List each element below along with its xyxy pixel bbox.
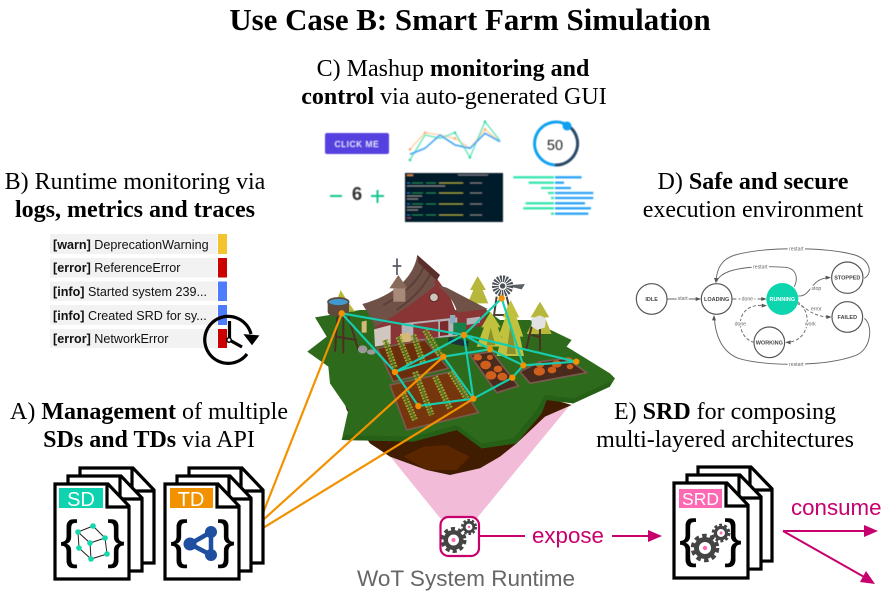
gauge: 50: 50 <box>547 138 563 154</box>
log row: info started: [info] Started system 239... <box>53 285 207 299</box>
heading: B runtime monitoring: B) Runtime monitoring via <box>5 169 266 195</box>
icon: SD document stack <box>55 468 154 579</box>
arrows: consume <box>783 495 881 584</box>
network nodes <box>338 295 579 409</box>
state machine diagram: start <box>678 296 688 302</box>
icon: clock history <box>205 316 258 363</box>
state machine diagram: done <box>742 297 753 303</box>
state machine diagram: stop <box>811 286 821 292</box>
gauge: 50 <box>535 122 578 165</box>
state machine diagram <box>636 246 870 368</box>
label: WoT System Runtime: WoT System Runtime <box>357 566 575 591</box>
title: Use Case B: Smart Farm Simulation <box>229 2 711 37</box>
button: click me <box>325 133 389 154</box>
braces: } <box>724 510 742 568</box>
terminal <box>405 173 503 222</box>
state machine diagram: FAILED <box>838 315 857 321</box>
bar chart <box>513 177 593 214</box>
state machine diagram: restart <box>753 265 768 271</box>
heading: D safe and secure <box>643 169 864 223</box>
state machine diagram: work <box>805 322 816 328</box>
island underside <box>307 352 572 475</box>
farm island <box>307 255 615 475</box>
IoT network edges <box>342 298 576 406</box>
panel: logs <box>50 234 258 363</box>
braces <box>679 510 742 568</box>
state machine diagram: STOPPED <box>834 276 860 282</box>
SD tag: SD <box>67 489 95 511</box>
button: click me: CLICK ME <box>335 139 379 149</box>
heading: A management <box>10 399 288 453</box>
orange connector lines <box>237 313 473 544</box>
braces <box>60 511 125 569</box>
line chart <box>409 120 500 161</box>
TD tag: TD <box>178 489 204 511</box>
icon: cube network <box>75 523 110 562</box>
heading: D safe and secure: D) Safe and secure <box>658 169 849 195</box>
state machine diagram: RUNNING <box>770 297 795 303</box>
island grass <box>307 310 615 448</box>
heading: C mashup monitoring <box>301 56 607 110</box>
log row: info created: [info] Created SRD for sy... <box>53 309 207 323</box>
braces: } <box>217 511 235 569</box>
heading: E SRD <box>596 399 854 453</box>
water tower right <box>526 315 546 351</box>
braces: { <box>60 511 78 569</box>
icon: TD document stack <box>165 468 263 579</box>
tractor <box>448 323 468 344</box>
braces <box>170 511 235 569</box>
SRD tag: SRD <box>682 489 719 509</box>
state machine diagram: LOADING <box>704 297 729 303</box>
gears <box>693 525 729 560</box>
pumpkins <box>473 354 573 381</box>
stepper: 6 <box>330 183 384 204</box>
braces: } <box>107 511 125 569</box>
heading: B runtime monitoring <box>5 169 266 223</box>
barn <box>362 255 488 347</box>
heading: D safe and secure: execution environment <box>643 197 864 223</box>
log row: error reference <box>50 258 227 278</box>
heading: C mashup monitoring: control via auto-generated GUI <box>301 84 607 110</box>
icon: SRD document stack <box>674 467 772 578</box>
braces: { <box>679 510 697 568</box>
wing roof <box>437 285 488 313</box>
state machine diagram: done <box>735 321 746 327</box>
heading: A management: A) Management of multiple <box>10 399 288 425</box>
state machine diagram: restart <box>789 362 804 368</box>
heading: E SRD: E) SRD for composing <box>614 399 836 425</box>
gable wall <box>375 278 458 347</box>
heading: A management: SDs and TDs via API <box>43 427 255 453</box>
cupola <box>389 275 407 288</box>
windmill <box>493 279 525 325</box>
heading: B runtime monitoring: logs, metrics and traces <box>15 197 255 223</box>
arrows: consume: consume <box>791 495 881 520</box>
corn rows <box>385 330 467 420</box>
arrow: expose <box>479 523 662 548</box>
trees front <box>477 300 524 356</box>
arrow: expose: expose <box>532 523 604 548</box>
panel: GUI widgets <box>325 120 593 222</box>
heading: E SRD: multi-layered architectures <box>596 427 854 453</box>
log row: warn: [warn] DeprecationWarning <box>53 238 209 252</box>
wing wall <box>447 308 487 335</box>
log row: error network <box>50 329 227 348</box>
state machine diagram: IDLE <box>645 297 658 303</box>
crop plots <box>377 340 448 382</box>
log row: error reference: [error] ReferenceError <box>53 261 180 275</box>
log row: warn <box>50 234 227 254</box>
water tower left <box>328 298 358 353</box>
stepper: 6: 6 <box>352 183 362 204</box>
state machine diagram: restart <box>789 246 804 252</box>
log row: info started <box>50 282 227 301</box>
pink projection cone <box>385 400 570 518</box>
braces: { <box>170 511 188 569</box>
log row: info created <box>50 305 227 325</box>
heading: C mashup monitoring: C) Mashup monitoring and <box>317 56 590 82</box>
state machine diagram: error <box>811 306 822 312</box>
state machine diagram: WORKING <box>756 340 783 346</box>
icon: WoT runtime gears <box>440 517 479 556</box>
icon: RDF triangle <box>184 526 217 561</box>
main roof <box>362 255 440 327</box>
log row: error network: [error] NetworkError <box>53 332 168 346</box>
trees back <box>335 276 552 334</box>
